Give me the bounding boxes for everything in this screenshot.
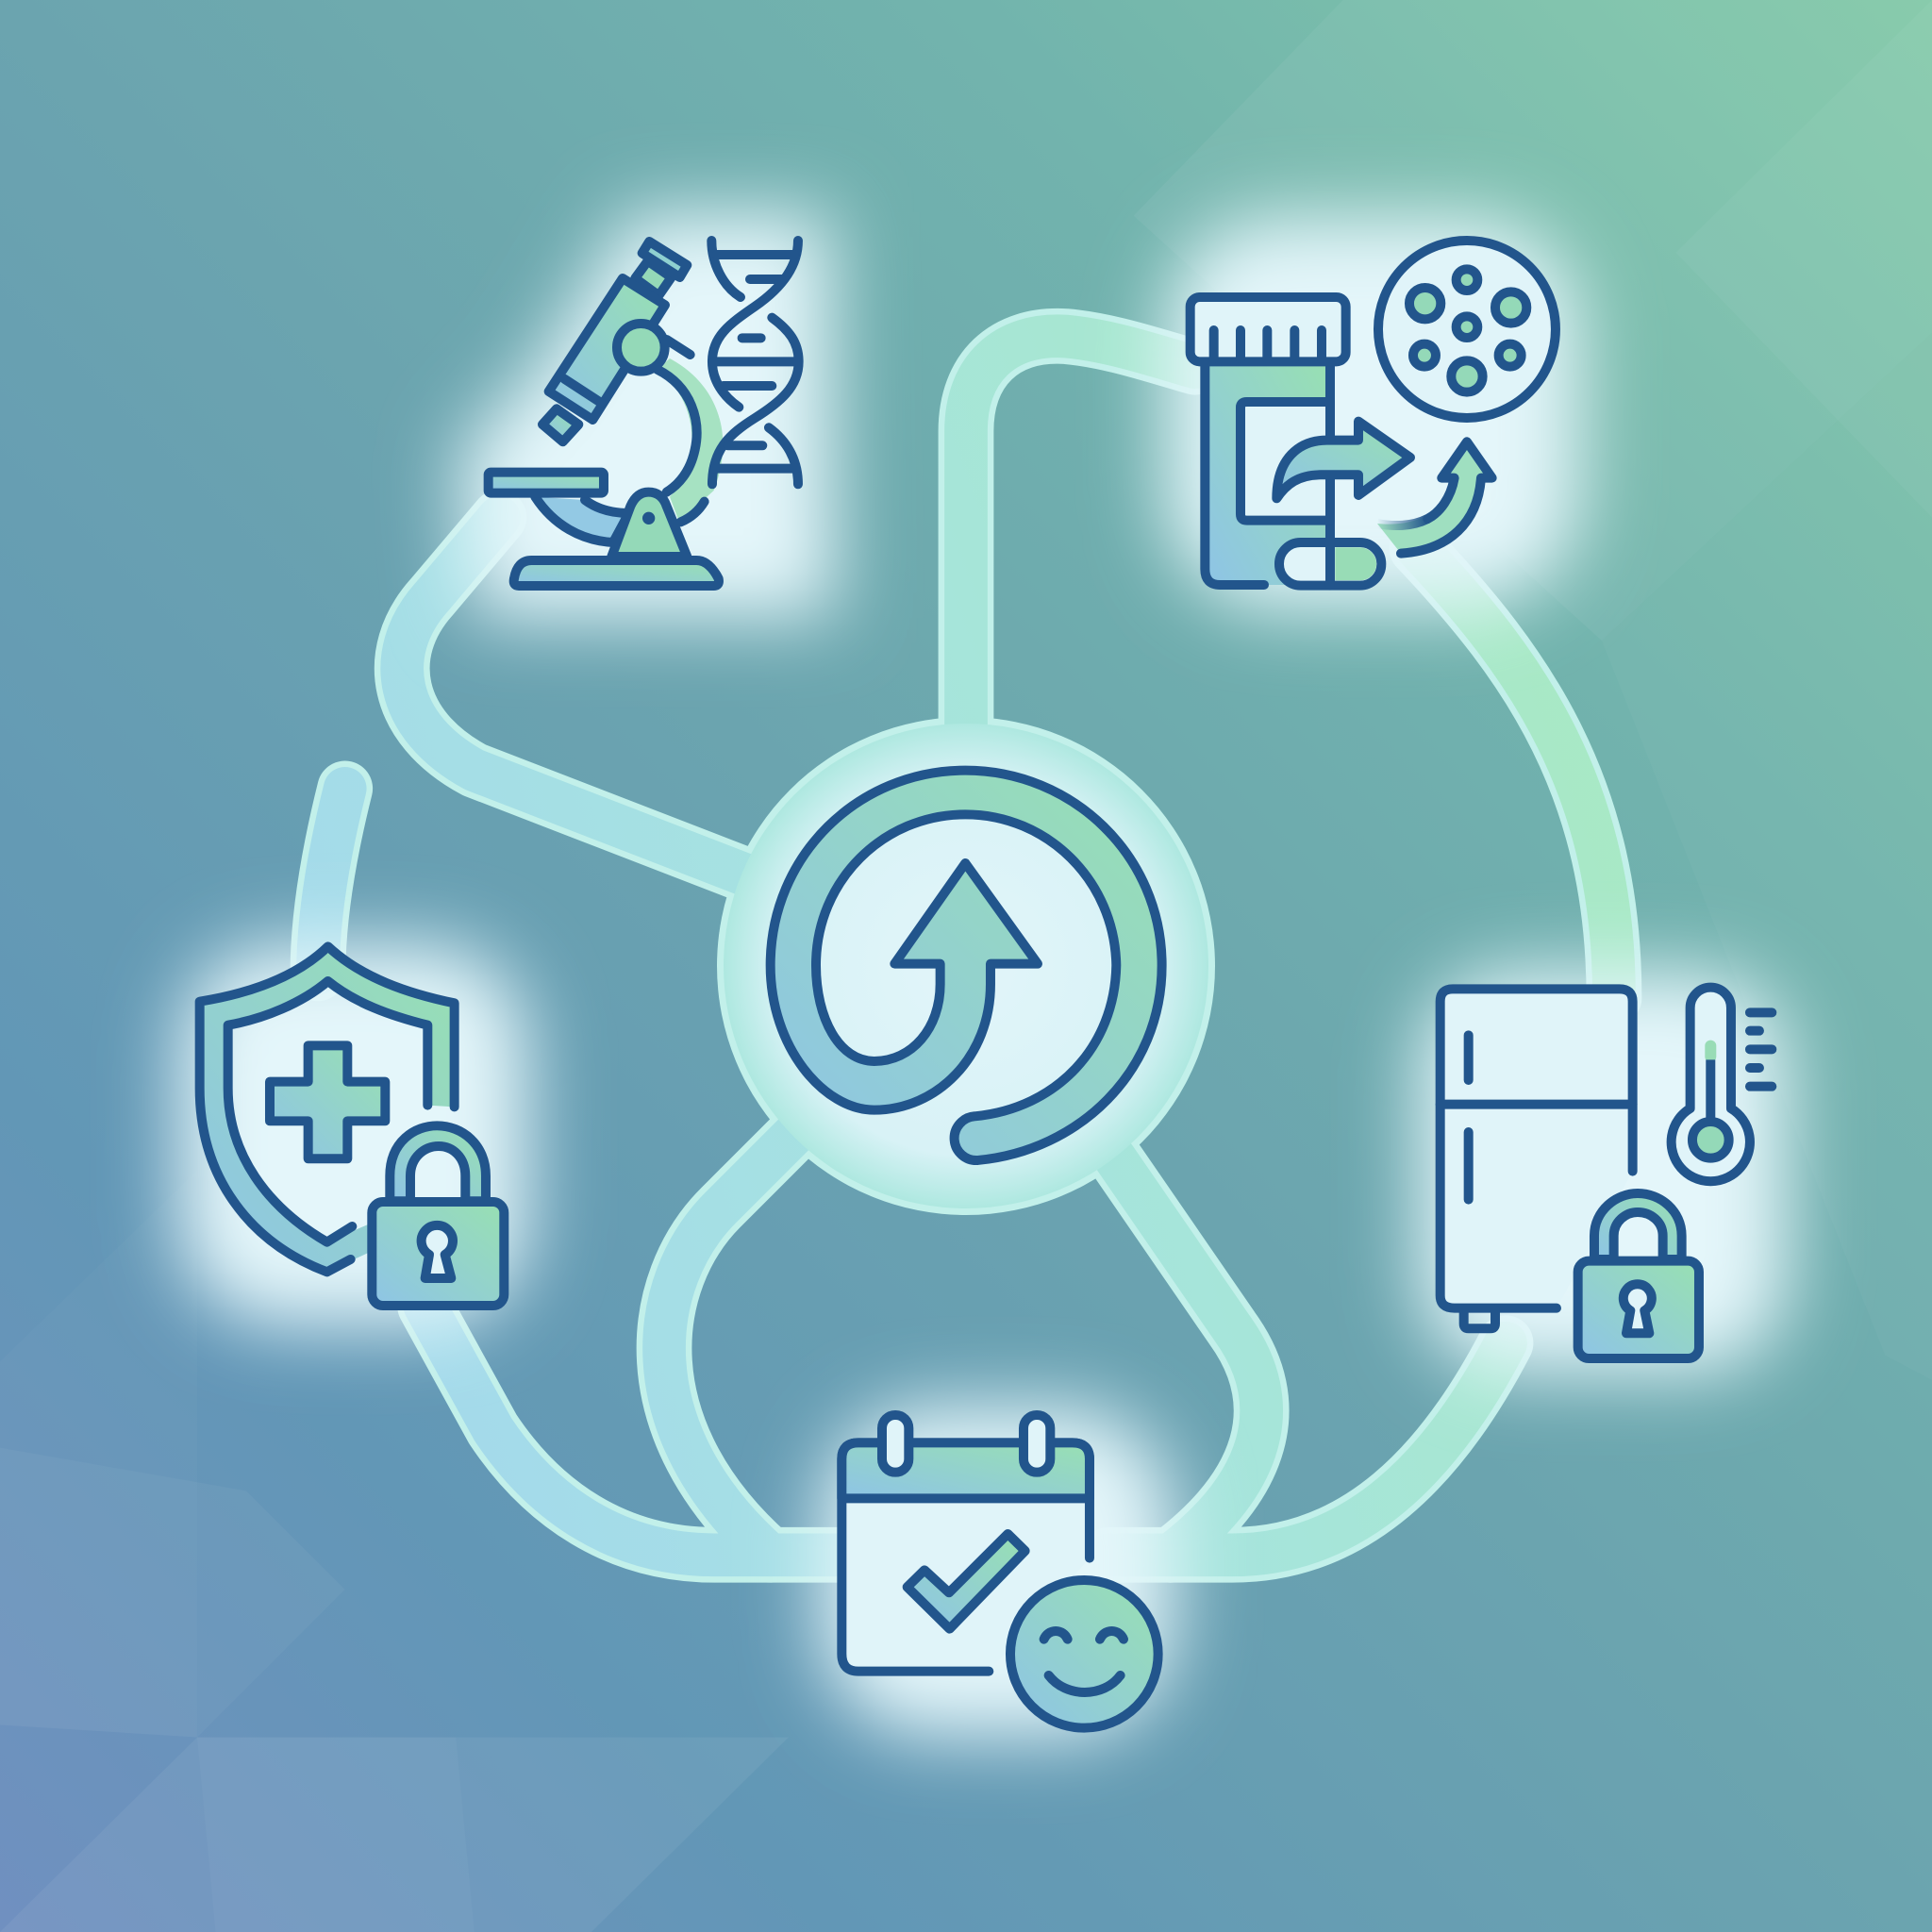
- central hub circle: [717, 717, 1215, 1215]
- thermometer green level: [1705, 1041, 1716, 1062]
- capsule green half: [1335, 547, 1376, 580]
- base: [514, 560, 719, 586]
- connector ribbons: inner fill: [318, 336, 1614, 1555]
- label right edge: [1316, 402, 1344, 521]
- icon: pill bottle and cells: [1191, 241, 1556, 586]
- thermometer outline: [1672, 988, 1750, 1181]
- shackle: [390, 1125, 486, 1201]
- cap ticks: [1214, 330, 1322, 358]
- bottle cap: [1191, 297, 1346, 361]
- calendar page: [841, 1442, 1090, 1672]
- icon: calendar and smiley: [841, 1415, 1158, 1728]
- petri dish: [1378, 241, 1556, 418]
- calendar header: [841, 1442, 1090, 1498]
- tube band: [564, 379, 601, 403]
- shield band: [200, 946, 455, 1272]
- shield inner edge: [228, 981, 427, 1242]
- thermometer ticks: [1750, 1012, 1772, 1087]
- knob arm: [667, 340, 691, 355]
- eyepiece cap: [642, 242, 687, 277]
- outer arc: [681, 502, 705, 522]
- icon: microscope and DNA: [489, 241, 799, 586]
- binder rings: [882, 1415, 1050, 1473]
- fridge body: [1441, 989, 1633, 1308]
- cross: [270, 1045, 385, 1158]
- smiley face: [1010, 1580, 1158, 1728]
- spiral arrow emblem: [771, 771, 1162, 1160]
- stage holder: [535, 497, 629, 542]
- fridge foot: [1464, 1309, 1495, 1328]
- icon glows: [179, 212, 1788, 1736]
- icon: refrigerator, thermometer and lock: [1441, 988, 1772, 1358]
- bottle body fill: [1205, 361, 1330, 585]
- icon: medical shield and lock: [200, 946, 504, 1306]
- thermometer bulb: [1692, 1122, 1729, 1158]
- shackle: [1594, 1193, 1682, 1259]
- thermometer stem: [1696, 1059, 1724, 1123]
- pillar: [611, 492, 687, 557]
- eyepiece neck: [635, 261, 672, 295]
- cells: [1409, 269, 1526, 392]
- keyhole: [1624, 1284, 1652, 1333]
- connector ribbons: outer outline: [318, 336, 1614, 1555]
- curved arrow fill: [1377, 441, 1492, 554]
- shield outer edge: [200, 946, 455, 1272]
- fridge details: [1441, 1035, 1633, 1200]
- microscope tube: [549, 278, 665, 420]
- lock body: [372, 1202, 504, 1306]
- DNA helix: [711, 241, 799, 484]
- hub inner fill: [724, 724, 1208, 1208]
- pillar dot: [642, 512, 655, 525]
- focus knob: [617, 324, 665, 372]
- capsule divider: [1316, 542, 1344, 586]
- lock body: [1578, 1261, 1699, 1358]
- stage: [489, 473, 604, 493]
- curved arrow outline: [1401, 441, 1492, 554]
- bottle outline: [1205, 361, 1330, 585]
- arrow out of bottle: [1276, 422, 1410, 498]
- microscope arm shading: [658, 358, 723, 522]
- lens nub: [542, 408, 578, 441]
- smiley features: [1044, 1631, 1124, 1692]
- bottle label: [1241, 402, 1330, 521]
- curved arrow fading tail: [1377, 519, 1427, 525]
- arm arc: [658, 370, 697, 492]
- check mark: [908, 1534, 1025, 1629]
- keyhole: [422, 1225, 453, 1278]
- capsule: [1279, 542, 1381, 586]
